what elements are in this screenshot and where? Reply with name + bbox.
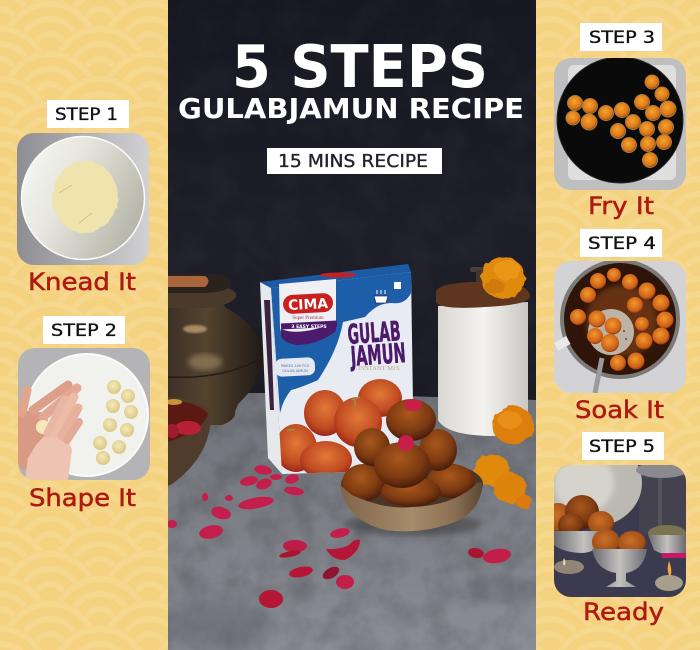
panel: central food photograph: [155, 0, 545, 650]
step 4 label: [580, 229, 662, 257]
caption: Shape It: Shape It: [29, 484, 136, 512]
marigold on lid: [481, 257, 525, 299]
syrup balls: [570, 268, 674, 371]
white canister with wooden lid: [436, 267, 530, 436]
Super Premium text: Super Premium: [292, 316, 324, 321]
step 2 label: STEP 2: [51, 321, 117, 341]
step 3 label: STEP 3: [589, 28, 655, 48]
CIMA logo: CIMA: [288, 296, 329, 314]
step 3 label: [580, 23, 662, 51]
step 4 label: STEP 4: [588, 234, 656, 254]
marigold beside canister: [492, 406, 534, 444]
makes 100 pcs pill: MAKES 100 PCS: [281, 364, 310, 368]
product name: INSTANT MIX: [358, 366, 401, 372]
step 2 label: [43, 316, 125, 344]
step 1 label: STEP 1: [55, 105, 118, 125]
dough balls: [93, 380, 138, 465]
makes 100 pcs pill: GULAB JAMUN: [282, 369, 308, 373]
step 5 label: [582, 432, 664, 460]
title: 5 STEPS: 5 STEPS: [232, 32, 488, 101]
caption: Soak It: Soak It: [575, 396, 664, 424]
scattered rose petals: [167, 464, 512, 608]
badge: 15 mins recipe: [267, 148, 442, 174]
CIMA logo: [283, 293, 333, 314]
step 5 label: STEP 5: [589, 437, 655, 457]
product box: Cima Gulab Jamun instant mix: [260, 264, 414, 479]
steam cup logo: [374, 290, 388, 303]
brass pot: [168, 274, 263, 425]
title: GULABJAMUN RECIPE: GULABJAMUN RECIPE: [178, 92, 524, 125]
badge: 15 mins recipe: 15 MINS RECIPE: [278, 151, 428, 172]
diyas: [554, 558, 683, 591]
step 1 label: [47, 100, 129, 128]
panel: left patterned background: [0, 0, 168, 650]
caption: Knead It: Knead It: [28, 268, 136, 296]
marigold beside bowl: [474, 454, 532, 509]
small copper bowl with petals: [165, 397, 211, 486]
product name: JAMUN: [349, 338, 407, 373]
step 4 photo: soaking in syrup: [554, 259, 686, 393]
step 5 photo: served gulab jamun: [554, 465, 686, 597]
step 2 photo: shaping dough balls: [18, 348, 150, 480]
product name: [348, 320, 406, 372]
hands: [18, 385, 79, 480]
back bowl: [554, 495, 614, 553]
3 Easy Steps band: 3 EASY STEPS: [291, 324, 327, 330]
slotted ladle: [587, 309, 634, 393]
right bowl with toppings: [648, 525, 686, 558]
front cup: [592, 529, 647, 587]
product name: GULAB: [347, 316, 402, 351]
gulab jamun on box: [275, 379, 402, 479]
caption: Ready: Ready: [583, 598, 664, 626]
step 3 photo: frying in pan: [554, 57, 686, 190]
caption: Fry It: Fry It: [588, 192, 654, 220]
frying balls: [566, 75, 676, 168]
panel: right patterned background: [536, 0, 700, 650]
bowl of gulab jamun: [340, 399, 483, 535]
step 1 photo: kneaded dough in bowl: [17, 133, 149, 265]
makes 100 pcs pill: [275, 357, 315, 377]
